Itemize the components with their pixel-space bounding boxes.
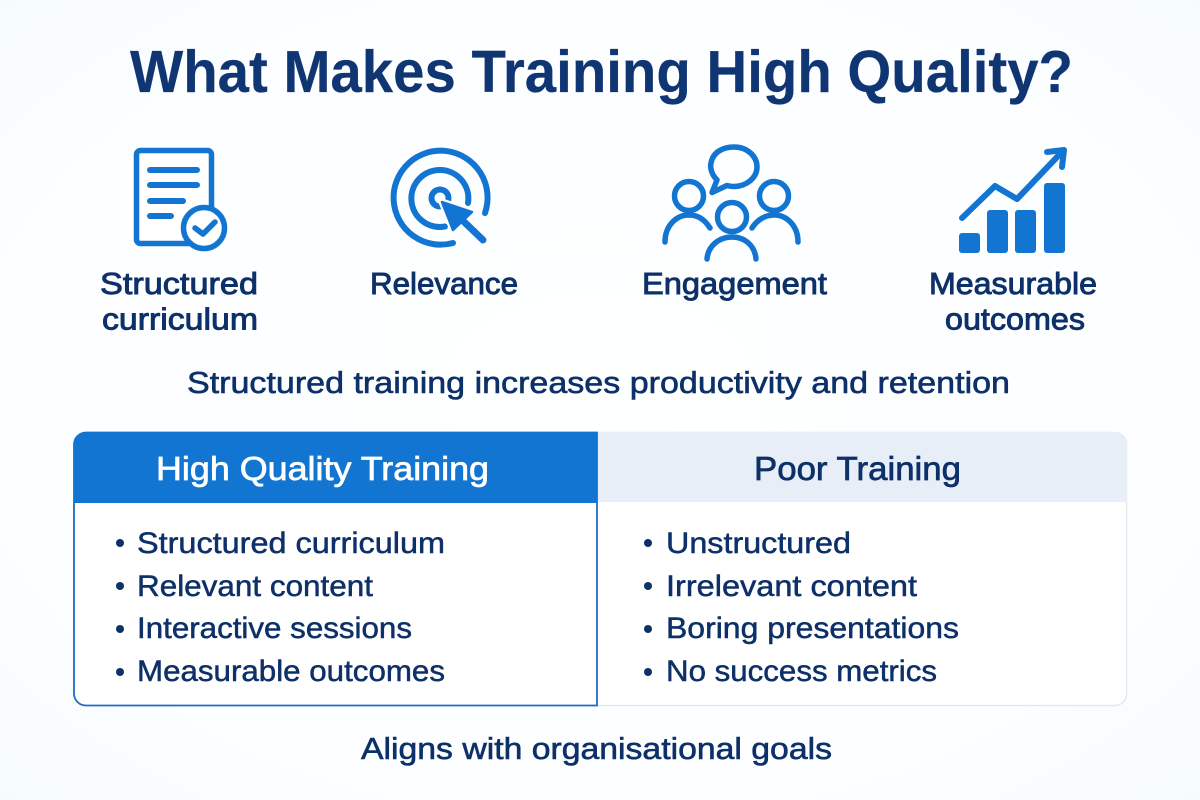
label: relevance: Relevance — [370, 266, 518, 301]
header: high quality training: High Quality Training — [156, 450, 489, 487]
label: structured curriculum — [100, 266, 258, 336]
header: high quality training — [74, 432, 598, 503]
subtitle: Structured training increases productivity and retention — [187, 365, 1010, 400]
footer statement: Aligns with organisational goals — [361, 731, 832, 766]
panel: engagement — [642, 147, 827, 301]
list: poor training points — [644, 527, 959, 688]
icon: target with cursor — [394, 151, 488, 245]
label: structured curriculum: curriculum — [102, 302, 258, 336]
panel: high quality training — [74, 432, 598, 706]
header: poor training: Poor Training — [754, 450, 961, 487]
comparison table — [74, 432, 1127, 706]
panel: poor training — [597, 432, 1127, 706]
icon: document with check — [136, 150, 224, 248]
icon: group with speech bubble — [665, 147, 798, 259]
panel: structured curriculum — [100, 150, 258, 336]
label: measurable outcomes — [929, 266, 1097, 336]
list: high quality points: Relevant content — [137, 570, 374, 603]
panel: measurable outcomes — [929, 150, 1097, 336]
list: high quality points: Structured curriculum — [137, 527, 445, 560]
list: poor training points: Boring presentations — [666, 612, 959, 645]
title: What Makes Training High Quality? — [130, 39, 1073, 105]
label: structured curriculum: Structured — [100, 266, 258, 301]
list: poor training points: Irrelevant content — [666, 570, 918, 603]
list: poor training points: No success metrics — [666, 655, 937, 688]
header: poor training — [597, 432, 1127, 502]
label: measurable outcomes: outcomes — [945, 302, 1085, 336]
list: high quality points — [116, 527, 445, 688]
label: engagement: Engagement — [642, 266, 827, 301]
panel: relevance — [370, 151, 518, 301]
list: high quality points: Interactive sessions — [137, 612, 412, 645]
list: high quality points: Measurable outcomes — [137, 655, 445, 688]
list: poor training points: Unstructured — [666, 527, 851, 560]
icon: rising bar chart with arrow — [959, 150, 1065, 253]
label: measurable outcomes: Measurable — [929, 266, 1097, 301]
